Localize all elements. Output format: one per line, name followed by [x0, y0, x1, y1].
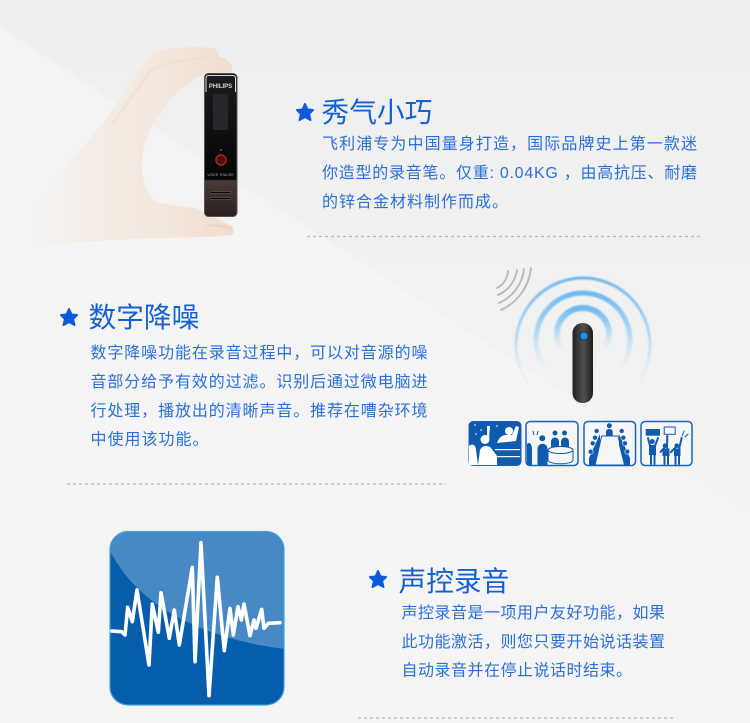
icon: star: [297, 104, 313, 120]
text block: 自动录音并在停止说话时结束。: [402, 662, 633, 680]
icon: concert: [469, 422, 521, 466]
text block: 此功能激活，则您只要开始说话装置: [402, 633, 666, 651]
heading: 数字降噪: [88, 302, 199, 333]
divider: [358, 717, 675, 719]
icon: protest signs: [641, 422, 692, 466]
text block: 的锌合金材料制作而成。: [322, 193, 509, 211]
icon row: usage scenes: [469, 422, 692, 466]
text block: [402, 604, 666, 680]
waveform: [112, 543, 280, 696]
text block: 数字降噪功能在录音过程中，可以对音源的噪: [90, 344, 428, 362]
recorder: [204, 74, 237, 216]
icon: star: [370, 571, 386, 587]
text block: 飞利浦专为中国量身打造，国际品牌史上第一款迷: [322, 135, 698, 153]
divider: [67, 483, 446, 485]
photo: hand holding recorder: [20, 47, 237, 250]
text block: [322, 135, 698, 211]
section: 数字降噪: [61, 302, 428, 448]
icon: waveform tile: [110, 530, 285, 705]
icon: recorder with signal rings: [516, 278, 650, 412]
hand: [20, 47, 234, 250]
text block: 声控录音是一项用户友好功能，如果: [402, 604, 666, 622]
icon: star: [61, 309, 77, 325]
text block: 音部分给予有效的过滤。识别后通过微电脑进: [90, 373, 428, 391]
text block: 中使用该功能。: [90, 430, 210, 448]
heading: 秀气小巧: [322, 97, 432, 128]
text block: 你造型的录音笔。仅重: 0.04KG ，由高抗压、耐磨: [322, 164, 698, 182]
text block: 行处理，播放出的清晰声音。推荐在嘈杂环境: [90, 401, 428, 420]
section: 声控录音: [370, 566, 666, 680]
section: 秀气小巧: [297, 97, 698, 211]
text block: [90, 344, 428, 448]
icon: conference table: [584, 422, 636, 466]
heading: 声控录音: [398, 566, 509, 597]
model label: VOICE TRACER: [207, 173, 234, 177]
divider: [307, 236, 700, 238]
icon: sound waves: [497, 268, 531, 310]
brand label: PHILIPS: [209, 84, 232, 90]
icon: round table: [526, 422, 578, 466]
